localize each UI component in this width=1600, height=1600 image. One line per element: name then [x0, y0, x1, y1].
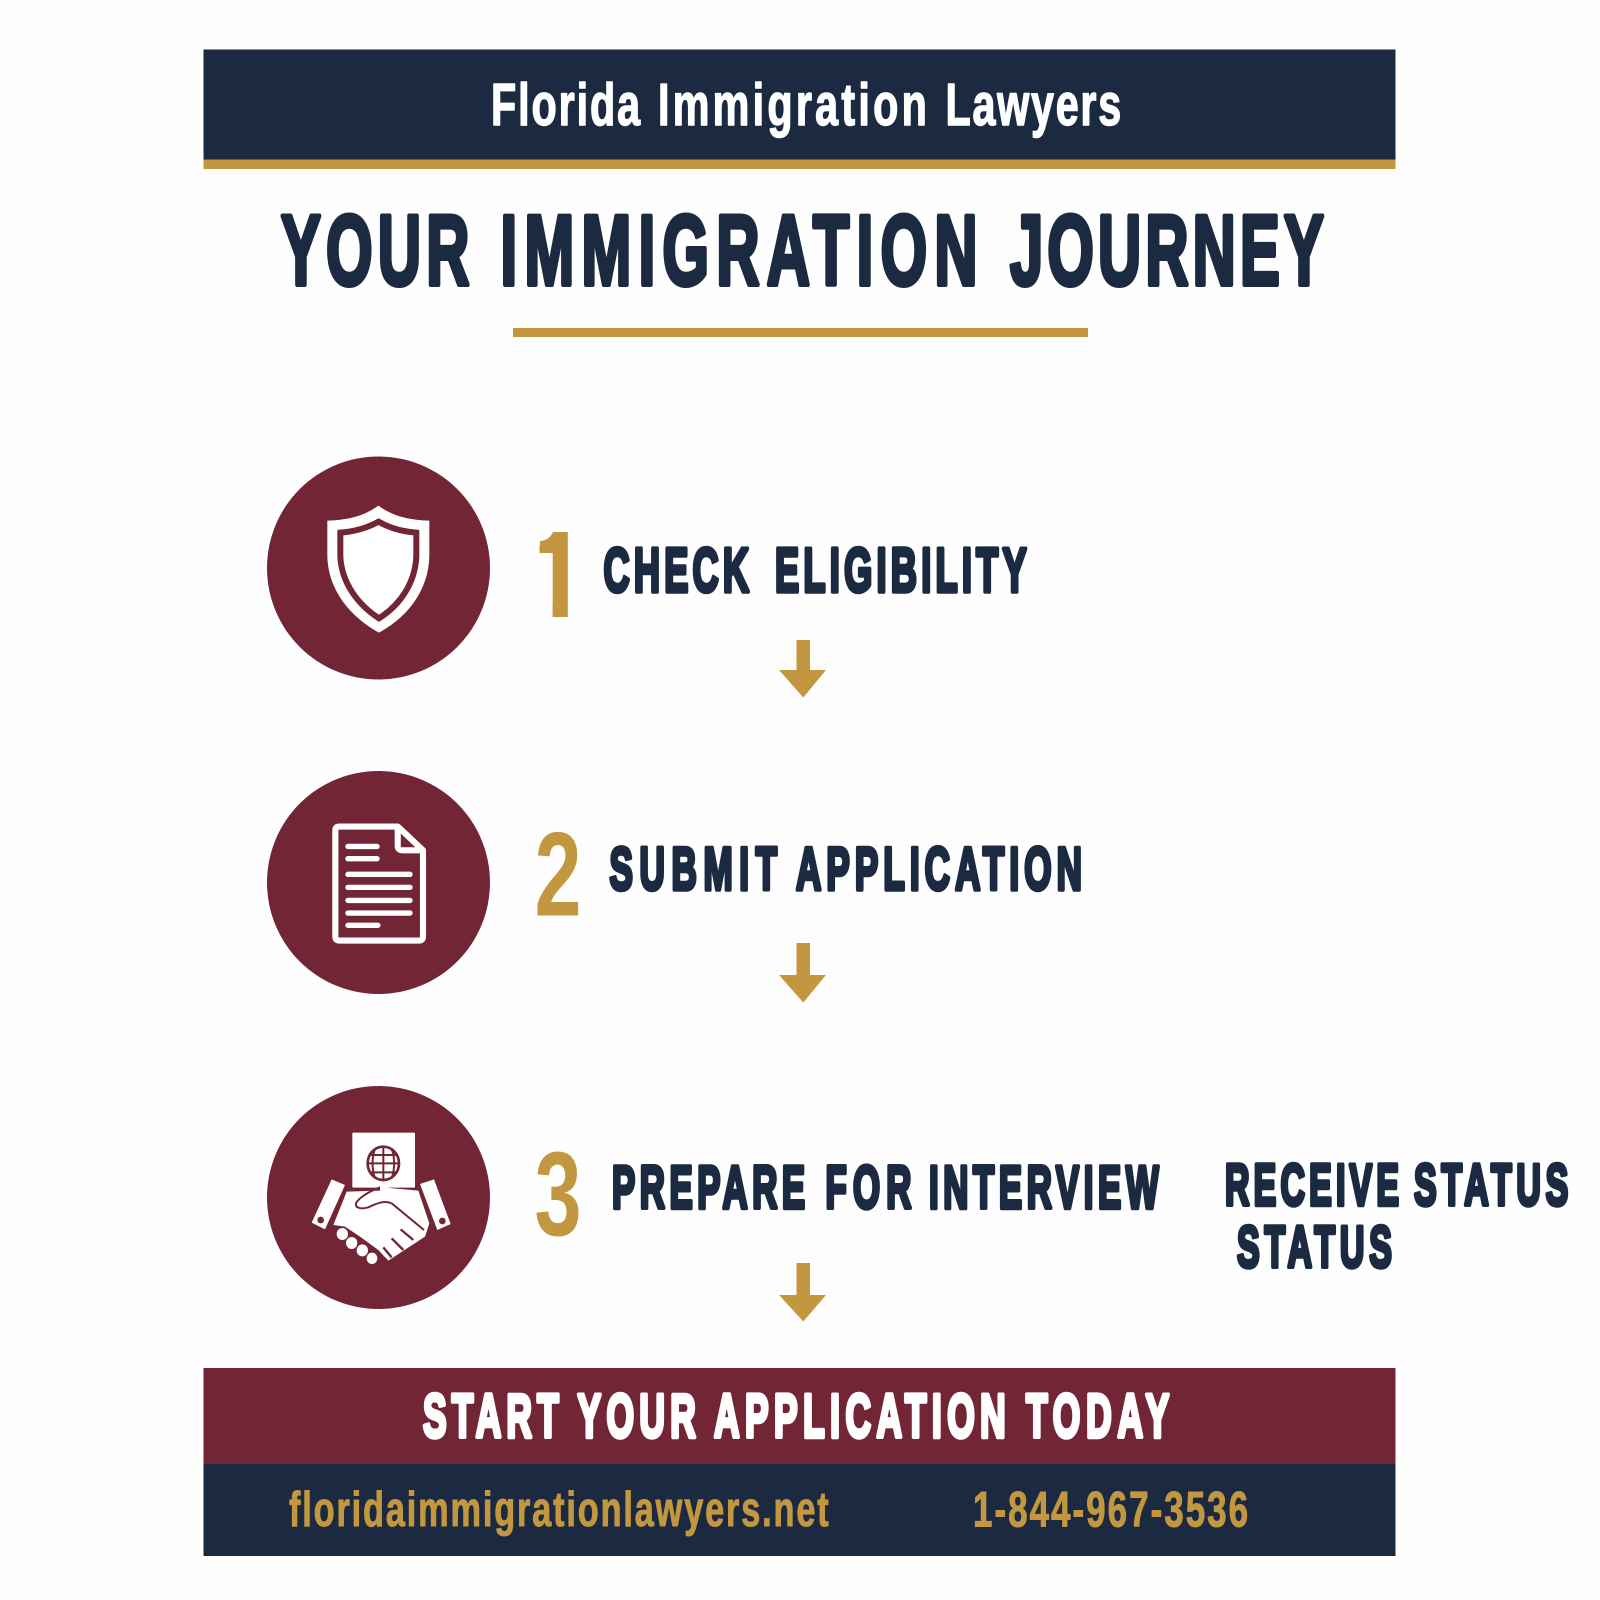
step label: prepare for interview: PREPARE	[612, 1155, 805, 1221]
step label: receive status: RECEIVE	[1225, 1153, 1399, 1218]
icon: document	[267, 771, 490, 994]
contact bar	[204, 1464, 1396, 1556]
step label: check eligibility: ELIGIBILITY	[775, 535, 1027, 605]
title: YOUR	[281, 196, 469, 306]
firm name: Florida	[491, 72, 641, 138]
number 3: 3	[534, 1127, 582, 1261]
call to action text: APPLICATION	[714, 1382, 1006, 1450]
arrow	[779, 1263, 826, 1322]
firm name: Immigration	[658, 72, 927, 138]
arrow	[779, 943, 826, 1002]
title	[281, 196, 1324, 306]
step label: receive status: STATUS	[1414, 1153, 1568, 1218]
step label: submit application	[610, 835, 1082, 903]
call to action text: START	[423, 1382, 559, 1450]
number 2: 2	[534, 808, 582, 942]
step label: check eligibility	[604, 535, 1027, 605]
number 1: 1	[528, 507, 596, 643]
icon: handshake and passport	[267, 1086, 490, 1309]
step label: check eligibility: CHECK	[604, 535, 749, 605]
step label: prepare for interview: FOR	[826, 1155, 911, 1221]
header banner	[204, 50, 1396, 169]
icon: shield	[267, 456, 490, 680]
step label: prepare for interview	[612, 1155, 1159, 1221]
title: JOURNEY	[1010, 196, 1324, 306]
call to action banner	[204, 1368, 1396, 1464]
phone: 1-844-967-3536	[973, 1482, 1248, 1538]
step label: submit application: SUBMIT	[610, 835, 777, 903]
number 1	[540, 532, 568, 617]
website: floridaimmigrationlawyers.net	[289, 1482, 829, 1536]
step label: receive status: STATUS	[1237, 1215, 1392, 1280]
call to action text	[423, 1382, 1169, 1450]
call to action text: TODAY	[1026, 1382, 1169, 1450]
firm name	[491, 72, 1121, 138]
step 2	[267, 771, 1082, 1002]
title: IMMIGRATION	[500, 196, 978, 306]
step label: submit application: APPLICATION	[796, 835, 1082, 903]
title underline	[513, 328, 1088, 337]
step 3	[267, 1086, 1159, 1322]
call to action text: YOUR	[578, 1382, 696, 1450]
arrow	[779, 640, 826, 698]
firm name: Lawyers	[946, 72, 1121, 138]
step 1	[267, 456, 1027, 698]
step label: receive status	[1225, 1153, 1568, 1280]
step label: prepare for interview: INTERVIEW	[929, 1155, 1159, 1221]
